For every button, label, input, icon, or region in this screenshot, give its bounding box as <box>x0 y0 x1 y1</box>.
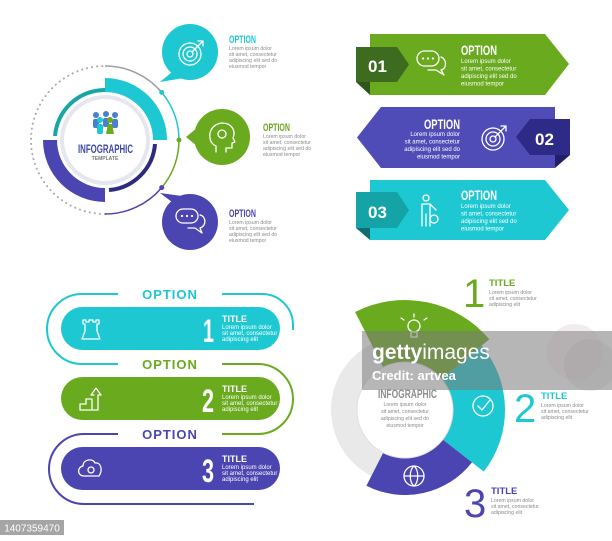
bubble: purple option: eiusmod tempor <box>229 238 266 244</box>
label: title 1: Lorem ipsum dolor <box>489 290 532 296</box>
bubble: cyan option: sit amet, consectetur <box>229 52 277 58</box>
pill: 2 green: Lorem ipsum dolor <box>222 395 272 401</box>
banner: 02 purple: sit amet, consectetur <box>405 140 460 146</box>
banner: 03 cyan: OPTION <box>461 187 497 203</box>
title: infographic template: INFOGRAPHIC <box>78 142 133 156</box>
icon: growth chart <box>80 388 101 410</box>
id tag: 1407359470 <box>4 524 60 534</box>
banner: 01 green: adipiscing elit sed do <box>461 74 517 80</box>
chart: donut segments: adipiscing elit sed do <box>381 416 429 422</box>
pill: 2 green: sit amet, consectetur <box>222 401 277 407</box>
icon: lightbulb <box>401 314 427 337</box>
label: title 1: 1 <box>463 272 485 316</box>
panel: option pills <box>47 287 293 504</box>
pill: 2 green: 2 <box>202 383 214 419</box>
pill: 3 purple: TITLE <box>222 454 247 464</box>
bubble: green option: sit amet, consectetur <box>263 140 311 146</box>
pill: 3 purple <box>61 447 280 490</box>
label: title 2: Lorem ipsum dolor <box>541 403 584 409</box>
banner: 02 purple: adipiscing elit sed do <box>404 147 461 153</box>
bubble: purple option <box>160 193 277 250</box>
label: title 2 <box>514 387 589 431</box>
banner: 01 green: OPTION <box>461 42 497 58</box>
text: donut center: INFOGRAPHIC <box>378 387 437 401</box>
label: title 2: TITLE <box>541 391 567 402</box>
chart: donut segments <box>344 300 505 495</box>
bubble: green option: adipiscing elit sed do <box>263 146 311 152</box>
label: title 1 <box>463 272 537 316</box>
bubble: green option <box>186 109 311 165</box>
purple band <box>43 140 105 202</box>
label: title 2: adipiscing elit <box>541 415 573 421</box>
pill: 3 purple: adipiscing elit <box>222 477 258 483</box>
icon: rook <box>82 320 100 339</box>
panel: circular infographic template: TEMPLATE <box>92 156 119 162</box>
label: title 1: sit amet, consectetur <box>489 296 537 302</box>
bubble: purple option: sit amet, consectetur <box>229 226 277 232</box>
heading: option 2: OPTION <box>142 357 198 372</box>
bubble: cyan option: eiusmod tempor <box>229 64 266 70</box>
bubble: cyan option: OPTION <box>229 34 256 46</box>
bubble: purple option: adipiscing elit sed do <box>229 232 277 238</box>
banner: 01 green: sit amet, consectetur <box>461 66 516 72</box>
banner: 03 cyan: sit amet, consectetur <box>461 212 516 218</box>
banner: 03 cyan: Lorem ipsum dolor <box>461 204 511 210</box>
bubble: purple option: Lorem ipsum dolor <box>229 220 272 226</box>
label: title 3: adipiscing elit <box>491 510 523 516</box>
bubble: green option: OPTION <box>263 122 290 134</box>
banner: 01 green <box>356 34 569 95</box>
pill: 3 purple: Lorem ipsum dolor <box>222 465 272 471</box>
banner: 01 green: Lorem ipsum dolor <box>461 59 511 65</box>
label: title 3: sit amet, consectetur <box>491 504 539 510</box>
banner: 03 cyan: eiusmod tempor <box>461 226 504 232</box>
icon: person with gear <box>422 195 438 226</box>
label: title 2: 2 <box>514 387 536 431</box>
icon: chat <box>417 51 446 75</box>
connector lines <box>47 294 118 364</box>
icon: globe <box>404 466 424 486</box>
pill: 1 cyan: Lorem ipsum dolor <box>222 325 272 331</box>
icon: target <box>179 41 203 65</box>
panel: circular infographic template <box>31 66 182 214</box>
watermark band <box>362 324 612 391</box>
banner: 03 cyan <box>356 180 569 240</box>
center circle <box>62 97 148 183</box>
bubble: green option: eiusmod tempor <box>263 152 300 158</box>
pill: 1 cyan <box>61 307 280 350</box>
pill: 2 green <box>61 377 280 420</box>
label: title 3 <box>464 482 539 526</box>
id tag <box>0 520 64 535</box>
banner: 02 purple: 02 <box>535 130 554 149</box>
label: title 3: TITLE <box>491 486 517 497</box>
banner: 01 green: 01 <box>368 57 387 76</box>
icon: chat bubbles <box>176 209 205 233</box>
banner: 03 cyan: 03 <box>368 203 387 222</box>
chart: donut segments: eiusmod tempor <box>386 423 424 429</box>
label: title 3: 3 <box>464 482 486 526</box>
banner: 03 cyan: adipiscing elit sed do <box>461 219 517 225</box>
pill: 1 cyan: sit amet, consectetur <box>222 331 277 337</box>
pill: 3 purple: 3 <box>202 453 214 489</box>
bubble: cyan option: Lorem ipsum dolor <box>229 46 272 52</box>
banner: 02 purple: OPTION <box>424 116 460 132</box>
bubble: green option: Lorem ipsum dolor <box>263 134 306 140</box>
banner: 01 green: eiusmod tempor <box>461 82 504 88</box>
label: title 2: sit amet, consectetur <box>541 409 589 415</box>
label: title 1: TITLE <box>489 278 515 289</box>
bubble: cyan option <box>160 24 277 82</box>
banner: 02 purple <box>357 107 570 168</box>
banner: 02 purple: Lorem ipsum dolor <box>410 132 460 138</box>
label: title 1: adipiscing elit <box>489 302 521 308</box>
pill: 1 cyan: TITLE <box>222 314 247 324</box>
chart: donut segments: sit amet, consectetur <box>381 409 429 415</box>
watermark band: gettyimages <box>372 341 490 364</box>
pill: 1 cyan: 1 <box>203 313 214 349</box>
icon: check <box>473 396 493 416</box>
cyan band <box>105 78 167 140</box>
heading: option 3: OPTION <box>142 427 198 442</box>
pill: 3 purple: sit amet, consectetur <box>222 471 277 477</box>
label: title 3: Lorem ipsum dolor <box>491 498 534 504</box>
icon: head with gear <box>210 123 235 152</box>
chart: donut segments: Lorem ipsum dolor <box>384 402 427 408</box>
heading: option 1: OPTION <box>142 287 198 302</box>
bubble: cyan option: adipiscing elit sed do <box>229 58 277 64</box>
watermark band: Credit: artvea <box>372 368 457 383</box>
pill: 2 green: adipiscing elit <box>222 407 258 413</box>
pill: 1 cyan: adipiscing elit <box>222 337 258 343</box>
banner: 02 purple: eiusmod tempor <box>417 154 460 160</box>
icon: target <box>482 126 506 150</box>
outer dotted arc <box>31 66 105 214</box>
icon: cloud gear <box>79 460 101 476</box>
bubble: purple option: OPTION <box>229 208 256 220</box>
pill: 2 green: TITLE <box>222 384 247 394</box>
icon: people <box>93 111 118 134</box>
